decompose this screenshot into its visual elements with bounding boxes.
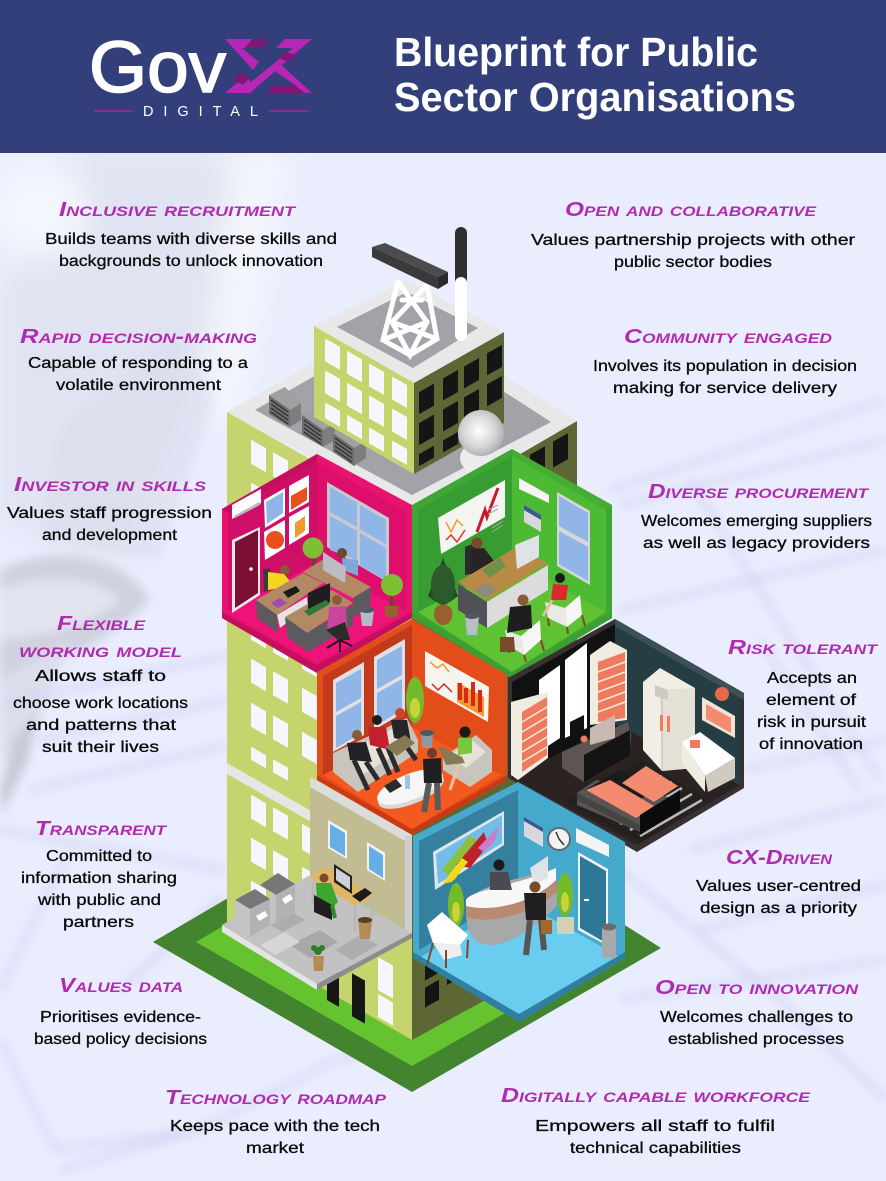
- callout: open to innovation: established processes: [668, 1031, 844, 1048]
- logo: GovX Digital: DIGITAL: [143, 104, 258, 120]
- callout: community engaged: making for service delivery: [613, 380, 837, 397]
- callout: digitally capable workforce: technical capabilities: [570, 1140, 741, 1157]
- callout: transparent: Transparent: [35, 818, 168, 840]
- rooftop server units: [269, 387, 366, 466]
- front desks: [256, 573, 353, 652]
- callout: community engaged: [593, 326, 857, 397]
- whiteboard chart: [438, 480, 505, 554]
- callout: transparent: Committed to: [46, 848, 152, 865]
- callout: inclusive recruitment: [45, 199, 337, 270]
- callout: risk tolerant: of innovation: [759, 736, 863, 753]
- callout: open and collaborative: Open and collaborative: [565, 199, 817, 221]
- header banner: [0, 0, 886, 153]
- callout: transparent: [21, 818, 177, 931]
- callout: technology roadmap: Keeps pace with the tech: [170, 1118, 380, 1135]
- callout: rapid decision-making: [20, 326, 257, 394]
- callout: flexible working model: choose work locations: [13, 695, 188, 712]
- callout: community engaged: Community engaged: [624, 326, 832, 348]
- beige office wall and open floor: [222, 777, 412, 990]
- callout: digitally capable workforce: [501, 1085, 811, 1157]
- callout: transparent: with public and: [37, 892, 161, 909]
- pink worker and chair: [326, 595, 352, 652]
- callout: values data: based policy decisions: [34, 1031, 207, 1048]
- callout: risk tolerant: [728, 637, 879, 753]
- callout: flexible working model: suit their lives: [42, 739, 159, 756]
- room: blue reception: [413, 782, 625, 1022]
- callout: transparent: partners: [63, 914, 134, 931]
- callout: technology roadmap: market: [246, 1140, 305, 1157]
- small windows: [328, 820, 385, 881]
- callout: digitally capable workforce: Digitally capable workforce: [501, 1085, 811, 1107]
- callout: open to innovation: Welcomes challenges to: [660, 1009, 853, 1026]
- lower roof: [227, 312, 577, 512]
- striped rug: [565, 760, 708, 842]
- left bookcase: [511, 692, 548, 780]
- room: green manager office: [412, 449, 612, 678]
- AC and panel: [519, 478, 549, 532]
- people on sofa: [347, 708, 472, 790]
- callout: open and collaborative: [531, 199, 856, 271]
- dresser: [682, 732, 735, 792]
- window: [557, 492, 590, 585]
- palm plant and bin: [428, 558, 479, 635]
- callout: cx-driven: CX-Driven: [726, 847, 833, 869]
- callout: cx-driven: [696, 847, 861, 917]
- plants: [448, 873, 574, 934]
- reception desk: [466, 856, 557, 945]
- callout: rapid decision-making: Capable of responding to a: [28, 355, 248, 372]
- abstract painting: [433, 811, 504, 890]
- tall white panels: [539, 643, 587, 752]
- wall charts and AC: [232, 475, 309, 560]
- building body walls: [227, 412, 577, 1040]
- callout: values data: [34, 975, 207, 1048]
- room: pink open-plan office: [222, 454, 412, 673]
- isometric building illustration: [153, 227, 744, 1092]
- bed: [577, 766, 680, 835]
- coffee table: [373, 762, 448, 816]
- callout: technology roadmap: [165, 1087, 387, 1157]
- wall chart: [425, 651, 489, 722]
- callout: risk tolerant: Risk tolerant: [728, 637, 879, 659]
- callout: investor in skills: [7, 474, 212, 544]
- title: [394, 29, 796, 120]
- upper tower: [314, 280, 504, 474]
- callout: flexible working model: working model: [19, 640, 182, 662]
- plants and bin: [302, 538, 403, 626]
- callout: diverse procurement: Diverse procurement: [648, 481, 870, 503]
- callout: open and collaborative: public sector bodies: [614, 254, 772, 271]
- callout: open to innovation: Open to innovation: [655, 977, 859, 999]
- callout: risk tolerant: risk in pursuit: [757, 714, 867, 731]
- callout: risk tolerant: Accepts an: [767, 670, 857, 687]
- callout: rapid decision-making: volatile environment: [56, 377, 222, 394]
- door: [232, 527, 260, 613]
- ground plate: [153, 790, 661, 1092]
- logo: GovX Digital: [89, 28, 312, 120]
- wall picture and clock: [702, 687, 735, 738]
- printers: [235, 873, 295, 937]
- visitors and chairs: [500, 573, 585, 662]
- bin: [602, 924, 616, 958]
- callout: flexible working model: [13, 613, 188, 756]
- callout: investor in skills: and development: [42, 527, 178, 544]
- callout: risk tolerant: element of: [766, 692, 857, 709]
- callout: cx-driven: Values user-centred: [696, 878, 861, 895]
- callout: investor in skills: Investor in skills: [14, 474, 207, 496]
- standing man: [423, 748, 442, 812]
- door: [578, 852, 608, 946]
- room: orange meeting lounge: [317, 619, 507, 835]
- callout: open to innovation: [655, 977, 859, 1048]
- callout: technology roadmap: Technology roadmap: [165, 1087, 387, 1109]
- callout: diverse procurement: Welcomes emerging suppliers: [641, 513, 872, 530]
- yellow worker: [263, 565, 294, 592]
- back desk and worker: [303, 548, 371, 617]
- callout: transparent: information sharing: [21, 870, 177, 887]
- callout: rapid decision-making: Rapid decision-making: [20, 326, 257, 348]
- middle bookcase: [590, 641, 627, 725]
- callout: values data: Values data: [59, 975, 183, 997]
- callout: digitally capable workforce: Empowers all staff to fulfil: [535, 1118, 775, 1135]
- white cabinet: [643, 668, 695, 771]
- customer: [524, 882, 552, 955]
- callout: investor in skills: Values staff progression: [7, 505, 212, 522]
- panel, clock, AC: [524, 817, 609, 857]
- windows: [333, 639, 405, 752]
- floor plant: [311, 945, 325, 971]
- callout: flexible working model: Flexible: [57, 613, 146, 635]
- callout: values data: Prioritises evidence-: [40, 1009, 201, 1026]
- title: Blueprint for Public: [394, 29, 758, 75]
- callout: open and collaborative: Values partnership projects with other: [531, 232, 856, 249]
- armchair: [427, 912, 468, 968]
- sofas: [333, 718, 492, 792]
- desk and worker: [310, 864, 375, 939]
- title: Sector Organisations: [394, 74, 796, 120]
- callout: flexible working model: Allows staff to: [35, 668, 166, 685]
- floor slab: [222, 875, 412, 990]
- callout: cx-driven: design as a priority: [700, 900, 857, 917]
- callout: inclusive recruitment: Inclusive recruitment: [59, 199, 297, 221]
- room: dark study with bookcases: [508, 619, 744, 852]
- callout: diverse procurement: [641, 481, 872, 552]
- callout: inclusive recruitment: Builds teams with diverse skills and: [45, 231, 337, 248]
- logo: GovX Digital: Gov: [89, 28, 226, 108]
- callout: flexible working model: and patterns that: [26, 717, 177, 734]
- callout: diverse procurement: as well as legacy providers: [643, 535, 870, 552]
- plant and bin: [406, 677, 434, 748]
- desk with lamp and monitor: [562, 715, 631, 782]
- desk with manager: [458, 535, 548, 628]
- receptionist: [490, 860, 512, 890]
- callout: inclusive recruitment: backgrounds to unlock innovation: [59, 253, 323, 270]
- white dome on roof: [458, 410, 504, 472]
- window: [327, 482, 389, 583]
- callout: community engaged: Involves its population in decision: [593, 358, 857, 375]
- antenna and pole: [372, 227, 467, 355]
